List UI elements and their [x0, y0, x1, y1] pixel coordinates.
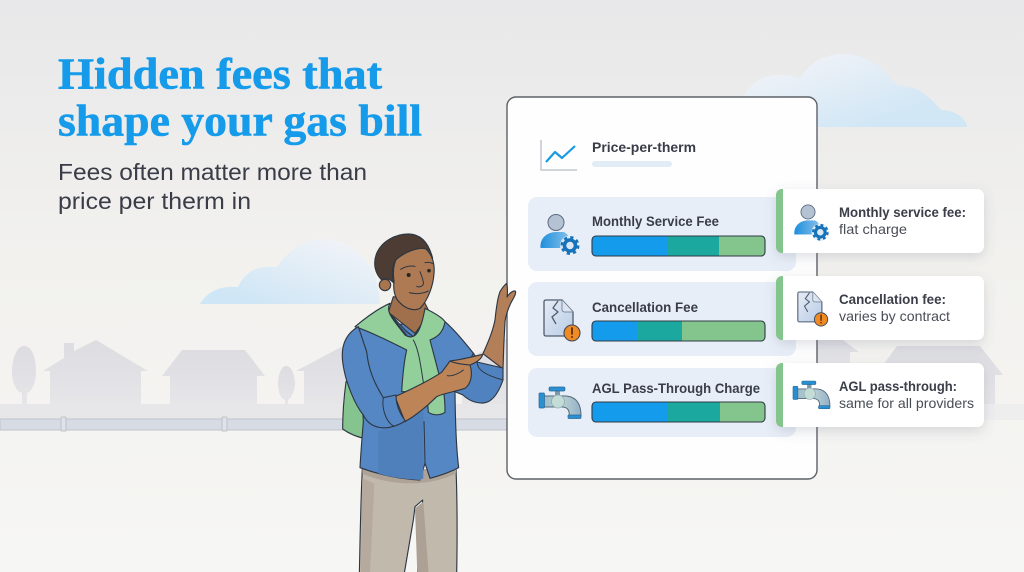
row: cancellation fee: [528, 282, 796, 356]
cloud: left: [200, 239, 380, 304]
icon: line chart: [541, 140, 577, 170]
house behind presenter: [462, 338, 507, 410]
facial features: [401, 262, 433, 294]
callout: monthly service fee: [776, 189, 984, 253]
tree left: [12, 346, 36, 404]
callout text: [839, 378, 974, 411]
sweater over shoulders: [355, 303, 445, 415]
house two: [162, 350, 265, 404]
label: Cancellation Fee: [592, 299, 698, 315]
icon: cracked document: [798, 292, 828, 326]
pipeline: [0, 417, 507, 431]
callout text: Monthly service fee:: [839, 204, 966, 220]
background: ground band: [0, 404, 510, 420]
callout text: [839, 204, 966, 237]
rolled right sleeve: [453, 353, 503, 403]
callout text: varies by contract: [839, 308, 950, 324]
icon: faucet: [539, 387, 581, 418]
collar: [385, 308, 429, 349]
callout text: flat charge: [839, 221, 907, 237]
house one: [43, 340, 148, 404]
title: [58, 50, 422, 146]
price-per-therm label: [592, 139, 696, 167]
callout: cancellation fee: [776, 276, 984, 340]
callout text: AGL pass-through:: [839, 378, 957, 394]
left sleeve: [342, 327, 405, 428]
trousers: [359, 468, 457, 572]
row: AGL pass-through charge: [528, 368, 796, 437]
callout text: Cancellation fee:: [839, 291, 946, 307]
house right small: [815, 340, 859, 365]
icon: cracked document: [544, 300, 580, 341]
label: AGL Pass-Through Charge: [592, 380, 760, 396]
cloud: top right: [742, 54, 967, 127]
subtitle: Fees often matter more than: [58, 159, 367, 185]
house three: [296, 345, 370, 404]
callout: AGL pass-through: [776, 363, 984, 427]
title: shape your gas bill: [58, 96, 422, 146]
house right large: [883, 346, 1003, 404]
pointing arm: [395, 354, 483, 422]
panel: fee dashboard: [507, 97, 817, 479]
bar: [592, 321, 765, 341]
face: [393, 248, 434, 310]
illustration: man presenting: [342, 234, 516, 572]
callout text: same for all providers: [839, 395, 974, 411]
icon: user with gear: [794, 205, 829, 241]
title: Hidden fees that: [58, 50, 382, 98]
bar: [592, 236, 765, 256]
neck: [388, 297, 430, 333]
hair: [375, 234, 433, 283]
bar: [592, 402, 765, 422]
subtitle: [58, 159, 367, 214]
price-per-therm label: Price-per-therm: [592, 139, 696, 155]
background: houses and trees: [12, 338, 1003, 410]
shirt body: [358, 322, 474, 480]
sweater back drape: [343, 382, 370, 438]
raised arm and hand: [483, 283, 516, 369]
icon: faucet: [793, 381, 830, 409]
tree small: [278, 366, 295, 404]
background: ground band right: [817, 404, 1024, 420]
ear: [379, 279, 391, 291]
row: monthly service fee: [528, 197, 796, 271]
subtitle: price per therm in: [58, 188, 251, 214]
callout text: [839, 291, 950, 324]
icon: user with gear: [540, 214, 580, 256]
label: Monthly Service Fee: [592, 213, 719, 229]
